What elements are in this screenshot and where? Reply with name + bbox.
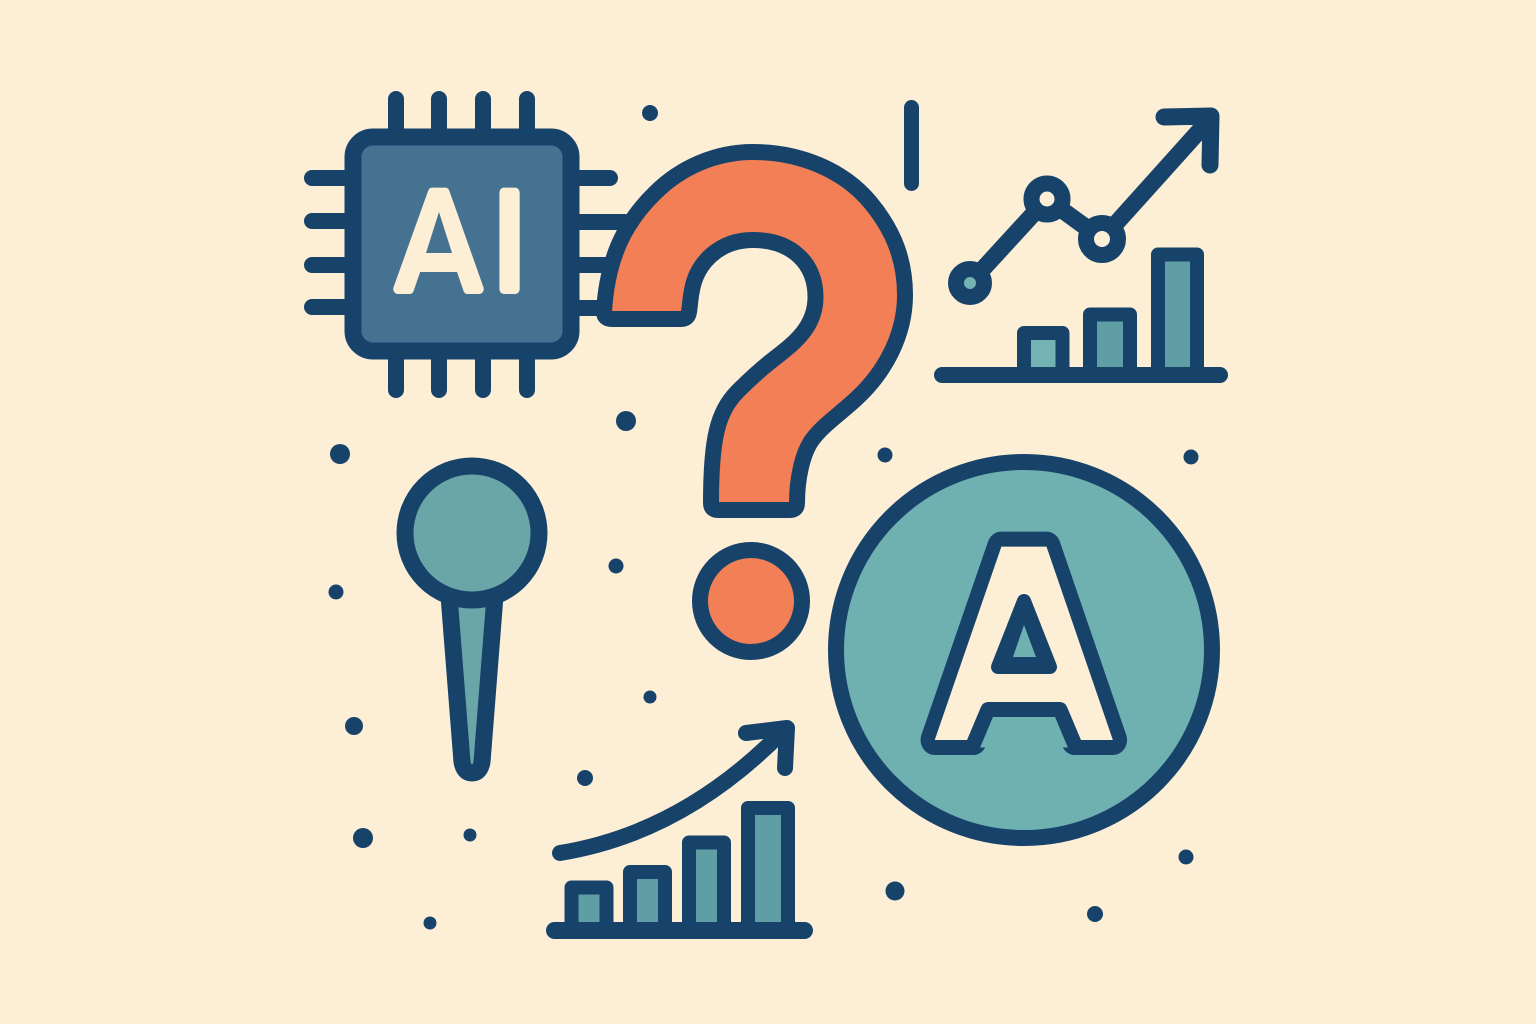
pin head: [405, 466, 539, 600]
letter A: A: [928, 486, 1120, 800]
bars: [1024, 254, 1197, 375]
baseline: [942, 367, 1220, 383]
chart: rising bars, bottom center: [554, 728, 804, 931]
rising line with arrow: [970, 116, 1211, 283]
chart: line and bars, top right: [942, 116, 1220, 375]
teal circle: [836, 462, 1212, 838]
icon: pin: [405, 466, 539, 773]
chip label crossbar: [419, 245, 459, 272]
icon: question mark: [604, 152, 905, 652]
question mark hook and stem: [604, 152, 905, 510]
letter A counter: [1013, 625, 1036, 657]
decorative vertical tick: [904, 100, 919, 191]
scattered dots: [328, 105, 1198, 930]
letter A notch under crossbar: [962, 710, 1086, 748]
bars: [572, 808, 788, 931]
pin spike: [449, 596, 495, 773]
icon: circled letter A: [836, 462, 1212, 838]
chip label: I: [492, 163, 527, 319]
chip label: A: [397, 163, 480, 319]
letter A crossbar fill: [982, 570, 1066, 704]
baseline: [554, 922, 804, 939]
letter A counter outline: [998, 601, 1050, 667]
data points: [956, 269, 984, 297]
chip body: [353, 137, 571, 351]
growth arrow: [560, 728, 787, 853]
icon: AI chip: [312, 99, 625, 390]
chip label counter: [426, 212, 452, 253]
chip pins: [312, 99, 625, 390]
question mark dot: [700, 550, 802, 652]
